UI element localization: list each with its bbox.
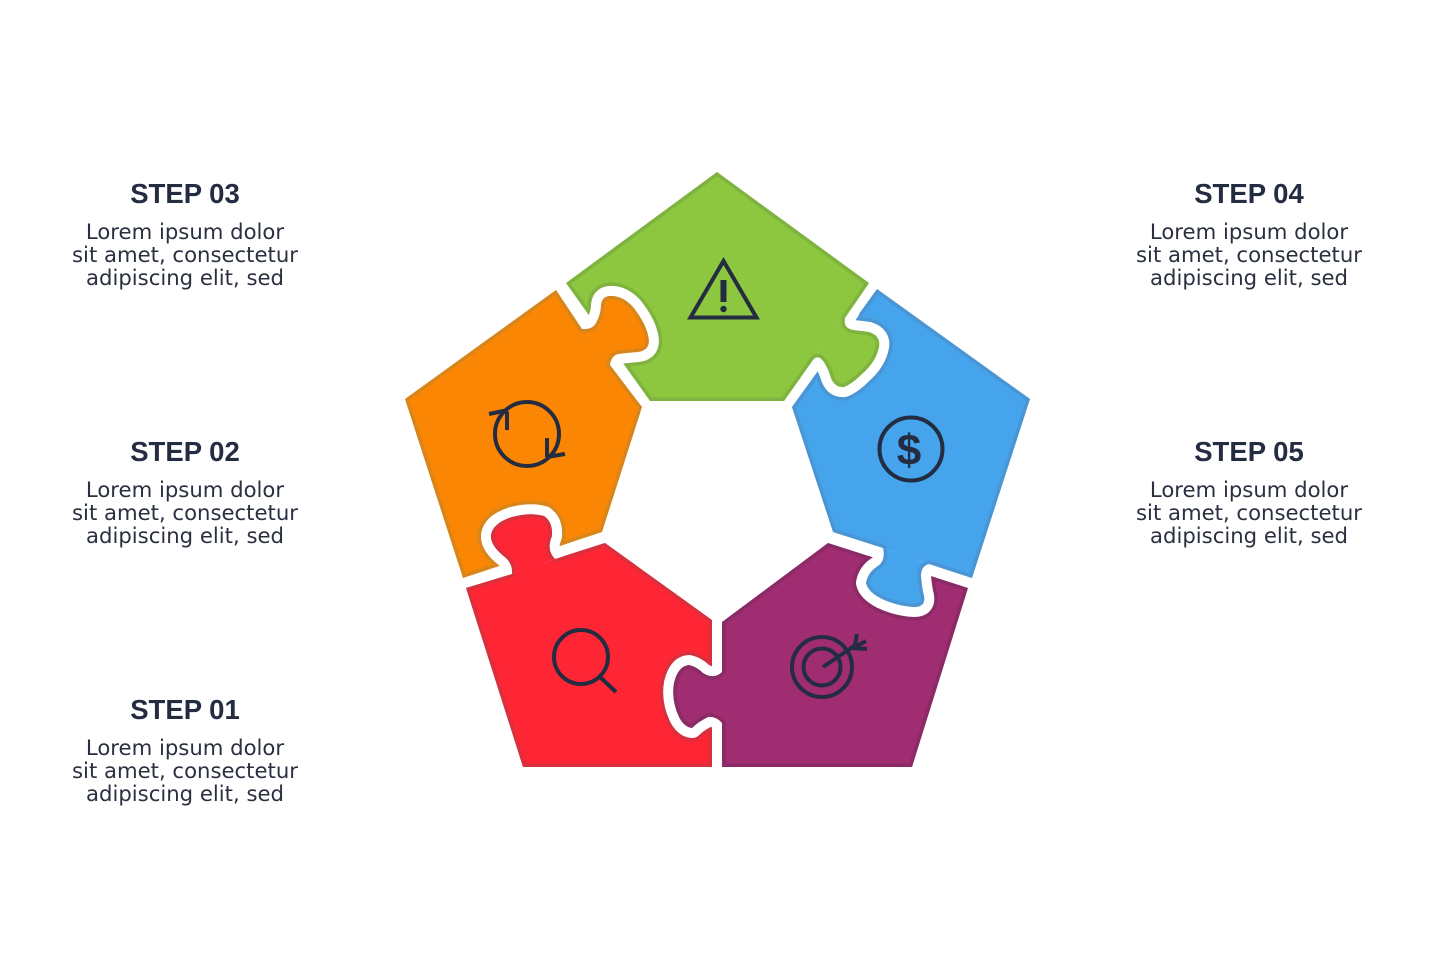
text block: step 01 (72, 694, 298, 806)
icon: refresh arrows (489, 402, 565, 466)
text block: step 03: STEP 03 (130, 178, 240, 209)
icon: target with arrow (792, 634, 867, 697)
icon: dollar coin (880, 418, 942, 480)
text block: step 02: adipiscing elit, sed (86, 523, 284, 548)
text block: step 02 (72, 436, 298, 548)
puzzle tab: blue into purple (833, 532, 972, 620)
text block: step 03: sit amet, consectetur (72, 242, 298, 267)
icon: magnifying glass (554, 630, 616, 692)
puzzle tab: orange into green (556, 282, 662, 407)
text block: step 04: Lorem ipsum dolor (1150, 219, 1348, 244)
text block: step 01: sit amet, consectetur (72, 758, 298, 783)
puzzle piece: green (566, 172, 879, 401)
text block: step 02: sit amet, consectetur (72, 500, 298, 525)
text block: step 02: Lorem ipsum dolor (86, 477, 284, 502)
puzzle tab: purple into red (660, 652, 712, 742)
puzzle tab: red into orange (466, 500, 604, 588)
icon: dollar coin: $ (897, 426, 921, 475)
puzzle piece: orange (405, 290, 649, 578)
text block: step 04: adipiscing elit, sed (1150, 265, 1348, 290)
puzzle piece: red (466, 543, 712, 767)
text block: step 05: Lorem ipsum dolor (1150, 477, 1348, 502)
text block: step 03: adipiscing elit, sed (86, 265, 284, 290)
icon: warning triangle (690, 261, 756, 318)
text block: step 05: STEP 05 (1194, 436, 1304, 467)
text block: step 02: STEP 02 (130, 436, 240, 467)
text block: step 01: adipiscing elit, sed (86, 781, 284, 806)
text block: step 04 (1136, 178, 1362, 290)
text block: step 04: sit amet, consectetur (1136, 242, 1362, 267)
puzzle tab: green into blue (784, 283, 893, 401)
text block: step 03 (72, 178, 298, 290)
puzzle piece: blue (792, 289, 1030, 607)
text block: step 05: adipiscing elit, sed (1150, 523, 1348, 548)
puzzle piece: purple (722, 543, 968, 767)
text block: step 05: sit amet, consectetur (1136, 500, 1362, 525)
text block: step 03: Lorem ipsum dolor (86, 219, 284, 244)
text block: step 01: Lorem ipsum dolor (86, 735, 284, 760)
text block: step 04: STEP 04 (1194, 178, 1304, 209)
text block: step 01: STEP 01 (130, 694, 240, 725)
text block: step 05 (1136, 436, 1362, 548)
